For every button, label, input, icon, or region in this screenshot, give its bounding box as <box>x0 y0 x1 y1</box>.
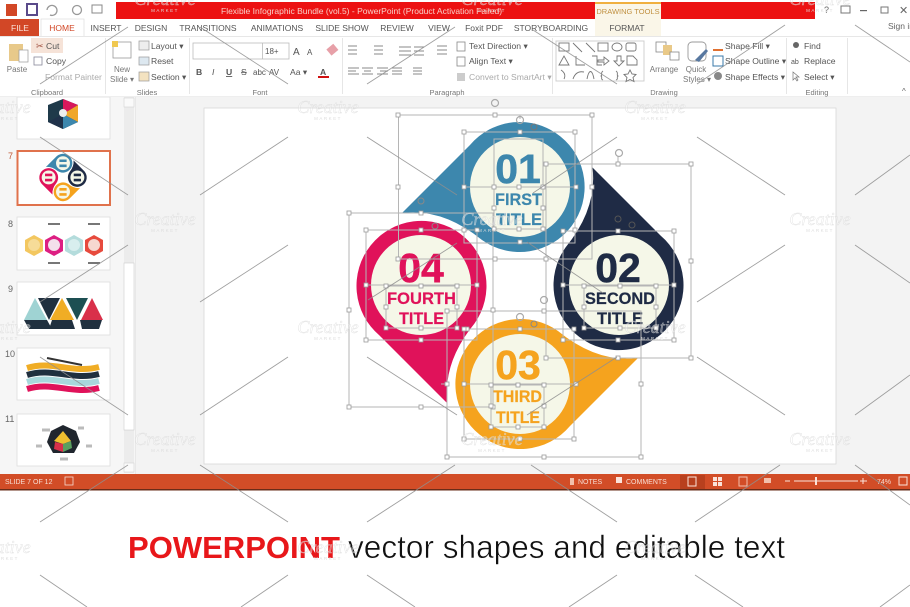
clipboard group: Copy <box>46 56 67 66</box>
text tools: Align Text ▾ <box>469 56 513 66</box>
watermarks: MARKET <box>641 116 669 121</box>
infographic: third title drop: 03 <box>495 342 541 388</box>
font group: B <box>196 67 202 77</box>
watermarks: Creative <box>297 97 359 117</box>
editing group: ab <box>791 59 799 66</box>
font group: A <box>320 67 326 77</box>
watermarks: Creative <box>297 317 359 337</box>
ribbon background <box>0 36 910 98</box>
infographic: second title drop: TITLE <box>597 309 643 328</box>
arrange and styles: Arrange <box>650 65 679 74</box>
infographic: first title drop: FIRST <box>495 190 543 209</box>
status bar: 74% <box>877 479 891 486</box>
watermarks: MARKET <box>641 336 669 341</box>
red title bar: Flexible Infographic Bundle (vol.5) - PowerPoint (Product Activation Failed) <box>221 6 502 16</box>
font group: abc <box>253 68 266 77</box>
watermarks: MARKET <box>151 448 179 453</box>
ribbon tabs: HOME <box>49 23 75 33</box>
ribbon tabs: Foxit PDF <box>465 23 503 33</box>
watermarks: MARKET <box>314 556 342 561</box>
editing group: Find <box>804 41 821 51</box>
watermarks: Creative <box>134 429 196 449</box>
thumbnail slide 7: 7 <box>8 151 13 161</box>
text tools: Text Direction ▾ <box>469 41 528 51</box>
font group: I <box>212 67 215 77</box>
arrange and styles: Shape Fill ▾ <box>725 41 771 51</box>
arrange and styles: Styles ▾ <box>683 75 711 84</box>
ribbon tabs: REVIEW <box>380 23 414 33</box>
thumbnail slide 10: 10 <box>5 349 15 359</box>
headline <box>128 529 785 565</box>
font group: A <box>293 47 300 58</box>
slides group: Slide ▾ <box>110 75 134 84</box>
infographic: third title drop <box>455 319 638 449</box>
arrange and styles: Shape Outline ▾ <box>725 56 787 66</box>
ribbon tabs: INSERT <box>90 23 122 33</box>
infographic: first title drop: 01 <box>495 146 541 192</box>
clipboard group: Clipboard <box>31 88 63 97</box>
text tools: Convert to SmartArt ▾ <box>469 72 552 82</box>
slides group: Section ▾ <box>151 72 187 82</box>
paragraph group <box>348 46 465 97</box>
quick access toolbar <box>6 4 102 16</box>
ribbon tabs: SLIDE SHOW <box>315 23 369 33</box>
watermarks: MARKET <box>314 336 342 341</box>
status bar: NOTES <box>578 479 602 486</box>
thumbnail slide 7 <box>8 151 110 205</box>
font group <box>193 43 338 97</box>
clipboard group: ✂ <box>36 41 44 51</box>
thumbnail slide 8: 8 <box>8 219 13 229</box>
infographic: first title drop <box>402 122 585 252</box>
watermarks: MARKET <box>314 116 342 121</box>
ribbon tabs: DESIGN <box>135 23 167 33</box>
red title bar <box>116 2 815 19</box>
font group: A <box>307 48 313 57</box>
thumbnail slide 9 <box>8 282 110 335</box>
selection boxes and handles <box>347 100 693 459</box>
font group: U <box>226 67 232 77</box>
watermarks: Creative <box>624 537 686 557</box>
ribbon tabs: STORYBOARDING <box>514 23 588 33</box>
thumbnail slide 10 <box>5 348 110 400</box>
font group: 18+ <box>265 47 279 56</box>
window controls: ? <box>824 5 829 15</box>
clipboard group: Format Painter <box>45 72 102 82</box>
infographic: fourth title drop: 04 <box>398 245 444 291</box>
slides group: Slides <box>137 88 157 97</box>
watermarks: Creative <box>624 97 686 117</box>
thumbnail slide 8 <box>8 217 110 270</box>
watermarks: Creative <box>789 209 851 229</box>
shape gallery <box>556 41 644 82</box>
thumbnail slide 11: 11 <box>5 414 14 424</box>
watermarks: MARKET <box>478 448 506 453</box>
watermarks: Creative <box>789 429 851 449</box>
infographic: second title drop: 02 <box>595 245 641 291</box>
paragraph group: Paragraph <box>429 88 465 97</box>
thumbnail pane <box>0 97 136 474</box>
infographic: fourth title drop: FOURTH <box>387 289 456 308</box>
status bar: COMMENTS <box>626 479 667 486</box>
arrange and styles: Quick <box>686 65 707 74</box>
editing group: ^ <box>902 87 906 96</box>
slides group: New <box>114 65 130 74</box>
ribbon tabs: FILE <box>11 23 29 33</box>
watermarks: MARKET <box>806 448 834 453</box>
watermarks: MARKET <box>806 8 834 13</box>
status bar <box>0 474 910 490</box>
editing group: Replace <box>804 56 836 66</box>
clipboard group: Paste <box>7 65 28 74</box>
watermarks: MARKET <box>151 8 179 13</box>
watermarks: Creative <box>297 537 359 557</box>
arrange and styles <box>650 41 787 97</box>
thumbnail slide 9: 9 <box>8 284 13 294</box>
infographic: fourth title drop <box>356 221 486 404</box>
ribbon tabs: VIEW <box>428 23 450 33</box>
font group: S <box>241 67 247 77</box>
slides group: Layout ▾ <box>151 41 184 51</box>
watermarks: Creative <box>461 209 523 229</box>
watermarks: MARKET <box>478 228 506 233</box>
ribbon tabs: TRANSITIONS <box>179 23 237 33</box>
ribbon tabs: ANIMATIONS <box>251 23 303 33</box>
drawing tools tab: FORMAT <box>609 23 645 33</box>
watermarks: MARKET <box>806 228 834 233</box>
drawing tools tab: DRAWING TOOLS <box>596 7 660 16</box>
slides group: Reset <box>151 56 174 66</box>
clipboard group <box>7 38 102 97</box>
watermarks: Creative <box>134 209 196 229</box>
infographic: second title drop <box>554 168 684 350</box>
watermarks: Creative <box>461 429 523 449</box>
window controls <box>824 5 910 31</box>
status bar: SLIDE 7 OF 12 <box>5 479 53 486</box>
watermarks: MARKET <box>641 556 669 561</box>
window controls: ✕ <box>899 5 908 17</box>
infographic: fourth title drop: TITLE <box>399 309 444 328</box>
slide canvas <box>204 108 836 464</box>
infographic: third title drop: TITLE <box>496 408 540 427</box>
headline: vector shapes and editable text <box>348 529 785 565</box>
arrange and styles: Shape Effects ▾ <box>725 72 786 82</box>
infographic: third title drop: THIRD <box>493 387 542 406</box>
text tools <box>457 41 552 82</box>
font group: Aa ▾ <box>290 67 308 77</box>
infographic: second title drop: SECOND <box>585 289 655 308</box>
slides group <box>110 41 187 97</box>
thumbnail slide 11 <box>5 414 110 466</box>
headline: POWERPOINT <box>128 530 340 565</box>
watermarks: MARKET <box>478 8 506 13</box>
editing group: Select ▾ <box>804 72 835 82</box>
watermarks: MARKET <box>151 228 179 233</box>
infographic: first title drop: TITLE <box>496 210 542 229</box>
drawing tools tab <box>595 2 661 36</box>
watermarks: Creative <box>624 317 686 337</box>
editing group: Editing <box>806 88 828 97</box>
font group: Font <box>252 88 268 97</box>
editing group <box>791 41 906 97</box>
thumbnail slide 6 <box>17 97 110 139</box>
font group: AV <box>269 68 280 77</box>
ribbon tabs <box>0 19 588 37</box>
workspace background <box>0 97 910 474</box>
clipboard group: Cut <box>46 41 60 51</box>
arrange and styles: Drawing <box>650 88 678 97</box>
